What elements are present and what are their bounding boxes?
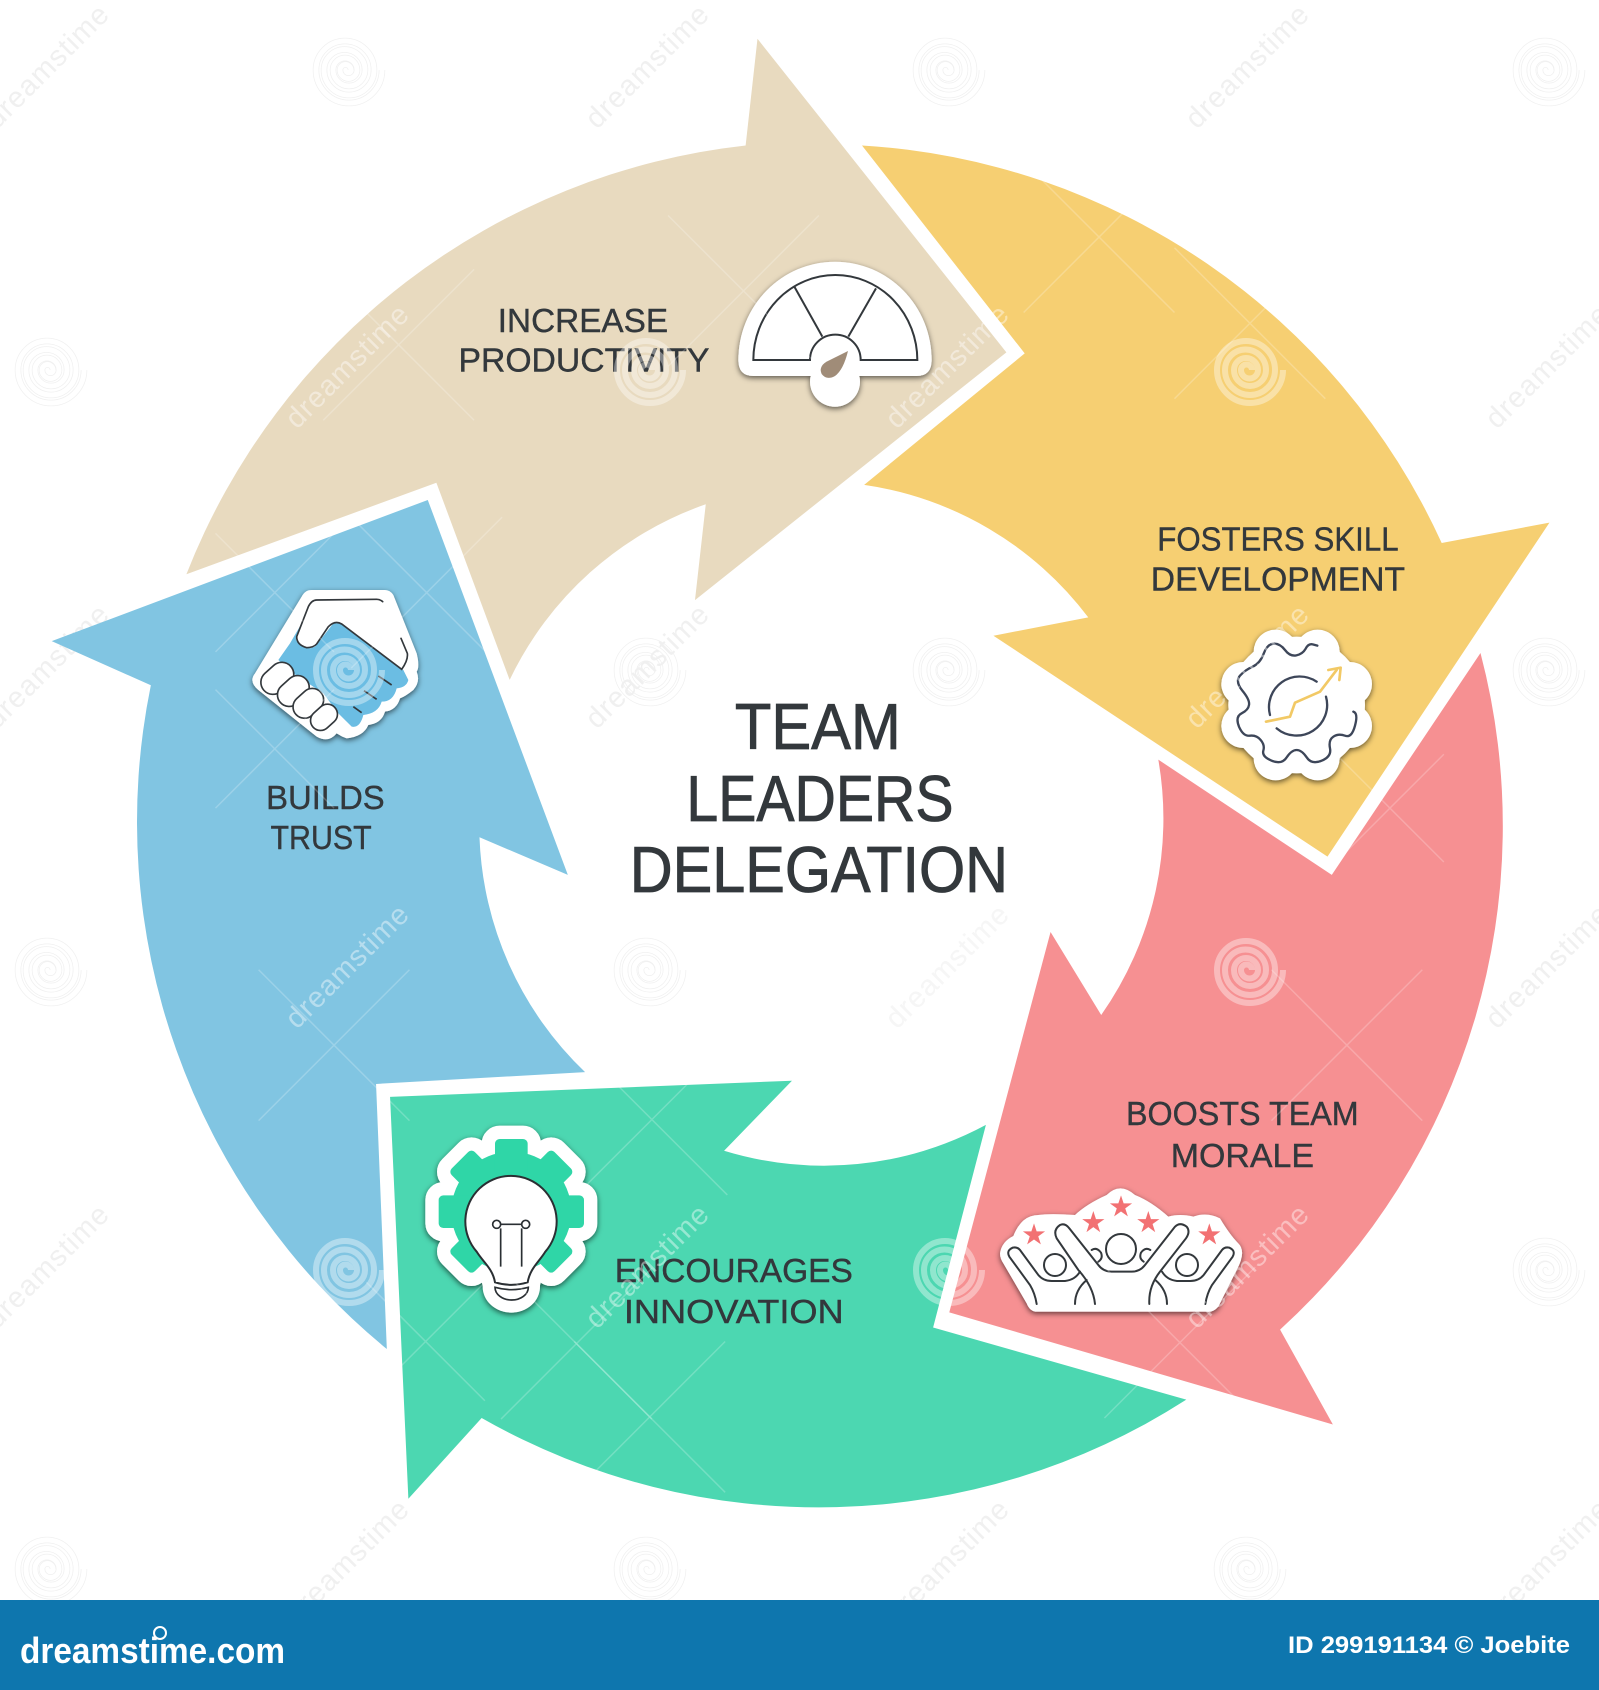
label: boosts team morale (1126, 1096, 1359, 1175)
green arrow (390, 1081, 1186, 1507)
footer image id: ID 299191134 © Joebite (1288, 1632, 1570, 1659)
label: increase productivity (458, 303, 710, 380)
label: boosts team morale: BOOSTS TEAM (1126, 1096, 1359, 1133)
label: fosters skill development: DEVELOPMENT (1151, 561, 1405, 598)
icon: cheering team with stars (1000, 1188, 1242, 1312)
icon: speedometer gauge (738, 262, 932, 407)
watermark layer over artwork: dreamstime (1179, 598, 1316, 735)
footer logo text: dreamstime.com (20, 1630, 285, 1671)
label: fosters skill development: FOSTERS SKILL (1157, 522, 1399, 559)
center title: TEAM (735, 690, 901, 763)
label: increase productivity: INCREASE (498, 303, 668, 340)
icon: light bulb in gear (439, 1139, 584, 1313)
tan arrow (186, 39, 1006, 680)
panel: fosters skill development (862, 145, 1549, 857)
watermark layer over artwork (216, 162, 1444, 1492)
label: builds trust (266, 780, 385, 857)
label: encourages innovation: INNOVATION (624, 1294, 844, 1331)
label: builds trust: BUILDS (266, 780, 385, 817)
center title: LEADERS (686, 762, 954, 835)
center title (630, 690, 1008, 906)
label: builds trust: TRUST (270, 820, 372, 857)
watermark layer over artwork: dreamstime (879, 298, 1016, 435)
watermark layer over artwork: dreamstime (279, 898, 416, 1035)
center title: DELEGATION (630, 833, 1008, 906)
label: encourages innovation: ENCOURAGES (615, 1253, 853, 1290)
panel: increase productivity (186, 39, 1006, 680)
watermark layer over artwork: dreamstime (879, 898, 1016, 1035)
watermark layer over artwork: dreamstime (279, 298, 416, 435)
footer bar (0, 1600, 1599, 1690)
panel: encourages innovation (390, 1081, 1186, 1507)
watermark layer on white background: dreamstime (879, 898, 1016, 1035)
watermark layer on white background: dreamstime (579, 0, 716, 135)
panel: boosts team morale (949, 653, 1503, 1424)
watermark layer on white background: dreamstime (579, 598, 716, 735)
panel: builds trust (52, 500, 585, 1349)
watermark layer over artwork: dreamstime (1179, 1198, 1316, 1335)
red arrow (949, 653, 1503, 1424)
blue arrow (52, 500, 585, 1349)
watermark layer over artwork: dreamstime (579, 1198, 716, 1335)
label: boosts team morale: MORALE (1171, 1138, 1314, 1175)
footer logo spiral mark (154, 1627, 166, 1639)
label: encourages innovation (615, 1253, 853, 1331)
label: increase productivity: PRODUCTIVITY (458, 343, 710, 380)
watermark layer on white background: dreamstime (279, 1493, 416, 1630)
watermark layer on white background: dreamstime (1179, 0, 1316, 135)
label: fosters skill development (1151, 522, 1405, 598)
icon: gear with growth arrow (1221, 630, 1372, 780)
yellow arrow (862, 145, 1549, 857)
icon: handshake (252, 590, 418, 739)
watermark layer on white background: dreamstime (879, 1493, 1016, 1630)
